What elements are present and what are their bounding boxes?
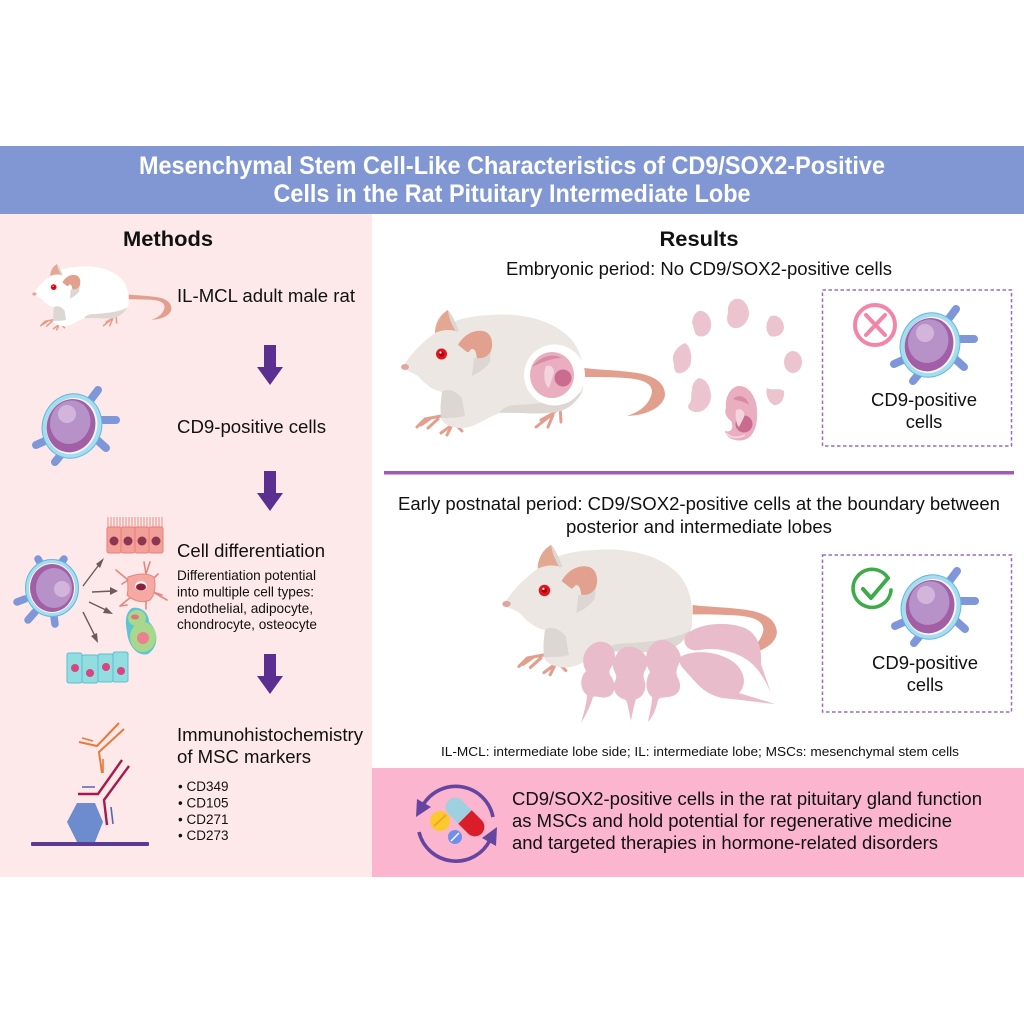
- arrow 3: [257, 654, 283, 694]
- icon: pills with cycle arrows: [416, 786, 497, 861]
- heading: immunohistochemistry: of MSC markers: [177, 746, 311, 767]
- illustration: embryo ring: [673, 299, 802, 440]
- label: cells: [907, 674, 943, 695]
- icon: epithelial cells: [67, 652, 128, 683]
- icon: cell: [892, 566, 975, 648]
- icon: white rat: [32, 264, 171, 330]
- heading: immunohistochemistry: Immunohistochemistry: [177, 724, 364, 745]
- differentiation arrows: [83, 558, 118, 643]
- icon: chondrocyte: [126, 608, 156, 654]
- label: [871, 389, 977, 432]
- label: cells: [906, 411, 942, 432]
- early postnatal heading: [398, 493, 1000, 537]
- conclusion text: and targeted therapies in hormone-related disorders: [512, 832, 938, 853]
- footnote: IL-MCL: intermediate lobe side; IL: intermediate lobe; MSCs: mesenchymal stem cells: [441, 744, 960, 759]
- list: MSC markers: • CD105: [178, 796, 228, 810]
- early postnatal heading: posterior and intermediate lobes: [566, 516, 832, 537]
- header band: [0, 146, 1024, 214]
- panel: conclusion: [372, 768, 1024, 877]
- pups: [581, 624, 775, 723]
- conclusion text: CD9/SOX2-positive cells in the rat pituitary gland function: [512, 788, 982, 809]
- embryonic period heading: Embryonic period: No CD9/SOX2-positive cells: [506, 258, 892, 279]
- illustration: pregnant rat: [401, 310, 665, 435]
- text: differentiation details: [177, 568, 317, 632]
- icon: cell: [891, 304, 974, 386]
- title: Mesenchymal Stem Cell-Like Characteristics of CD9/SOX2-Positive: [139, 153, 885, 180]
- panel: methods: [0, 214, 372, 877]
- list: MSC markers: • CD271: [178, 812, 228, 827]
- list: MSC markers: [178, 779, 228, 843]
- panel: embryonic CD9 status: [822, 290, 1012, 446]
- methods heading: Methods: [123, 228, 213, 251]
- results heading: Results: [660, 228, 738, 251]
- icon: immunohistochemistry: [31, 723, 149, 846]
- label: CD9-positive: [872, 652, 978, 673]
- icon: CD9-positive cell: [33, 385, 116, 467]
- icon: stem cell differentiating: [17, 559, 78, 624]
- label: [872, 652, 978, 695]
- icon: endothelial cells: [107, 517, 163, 553]
- heading: immunohistochemistry: [177, 724, 364, 767]
- label: rat: IL-MCL adult male rat: [177, 285, 355, 306]
- icon: osteocyte: [116, 562, 167, 609]
- arrow 1: [257, 345, 283, 385]
- illustration: mother rat with pups: [502, 545, 777, 723]
- panel: postnatal CD9 status: [822, 555, 1012, 712]
- text: differentiation details: chondrocyte, osteocyte: [177, 617, 317, 632]
- heading: cell differentiation: Cell differentiation: [177, 540, 325, 561]
- text: differentiation details: endothelial, adipocyte,: [177, 601, 313, 616]
- list: MSC markers: • CD273: [178, 828, 228, 843]
- text: differentiation details: Differentiation potential: [177, 568, 316, 583]
- header band: Cells in the Rat Pituitary Intermediate Lobe: [274, 181, 750, 208]
- divider: [384, 471, 1014, 474]
- icon: cross: [855, 305, 895, 345]
- label: CD9-positive: [871, 389, 977, 410]
- text: differentiation details: into multiple cell types:: [177, 584, 314, 600]
- early postnatal heading: Early postnatal period: CD9/SOX2-positive cells at the boundary between: [398, 493, 1000, 514]
- conclusion text: [512, 788, 982, 853]
- label: CD9 cells: CD9-positive cells: [177, 416, 326, 437]
- arrow 2: [257, 471, 283, 511]
- conclusion text: as MSCs and hold potential for regenerative medicine: [512, 810, 952, 831]
- icon: check: [853, 569, 891, 607]
- list: MSC markers: • CD349: [178, 779, 228, 794]
